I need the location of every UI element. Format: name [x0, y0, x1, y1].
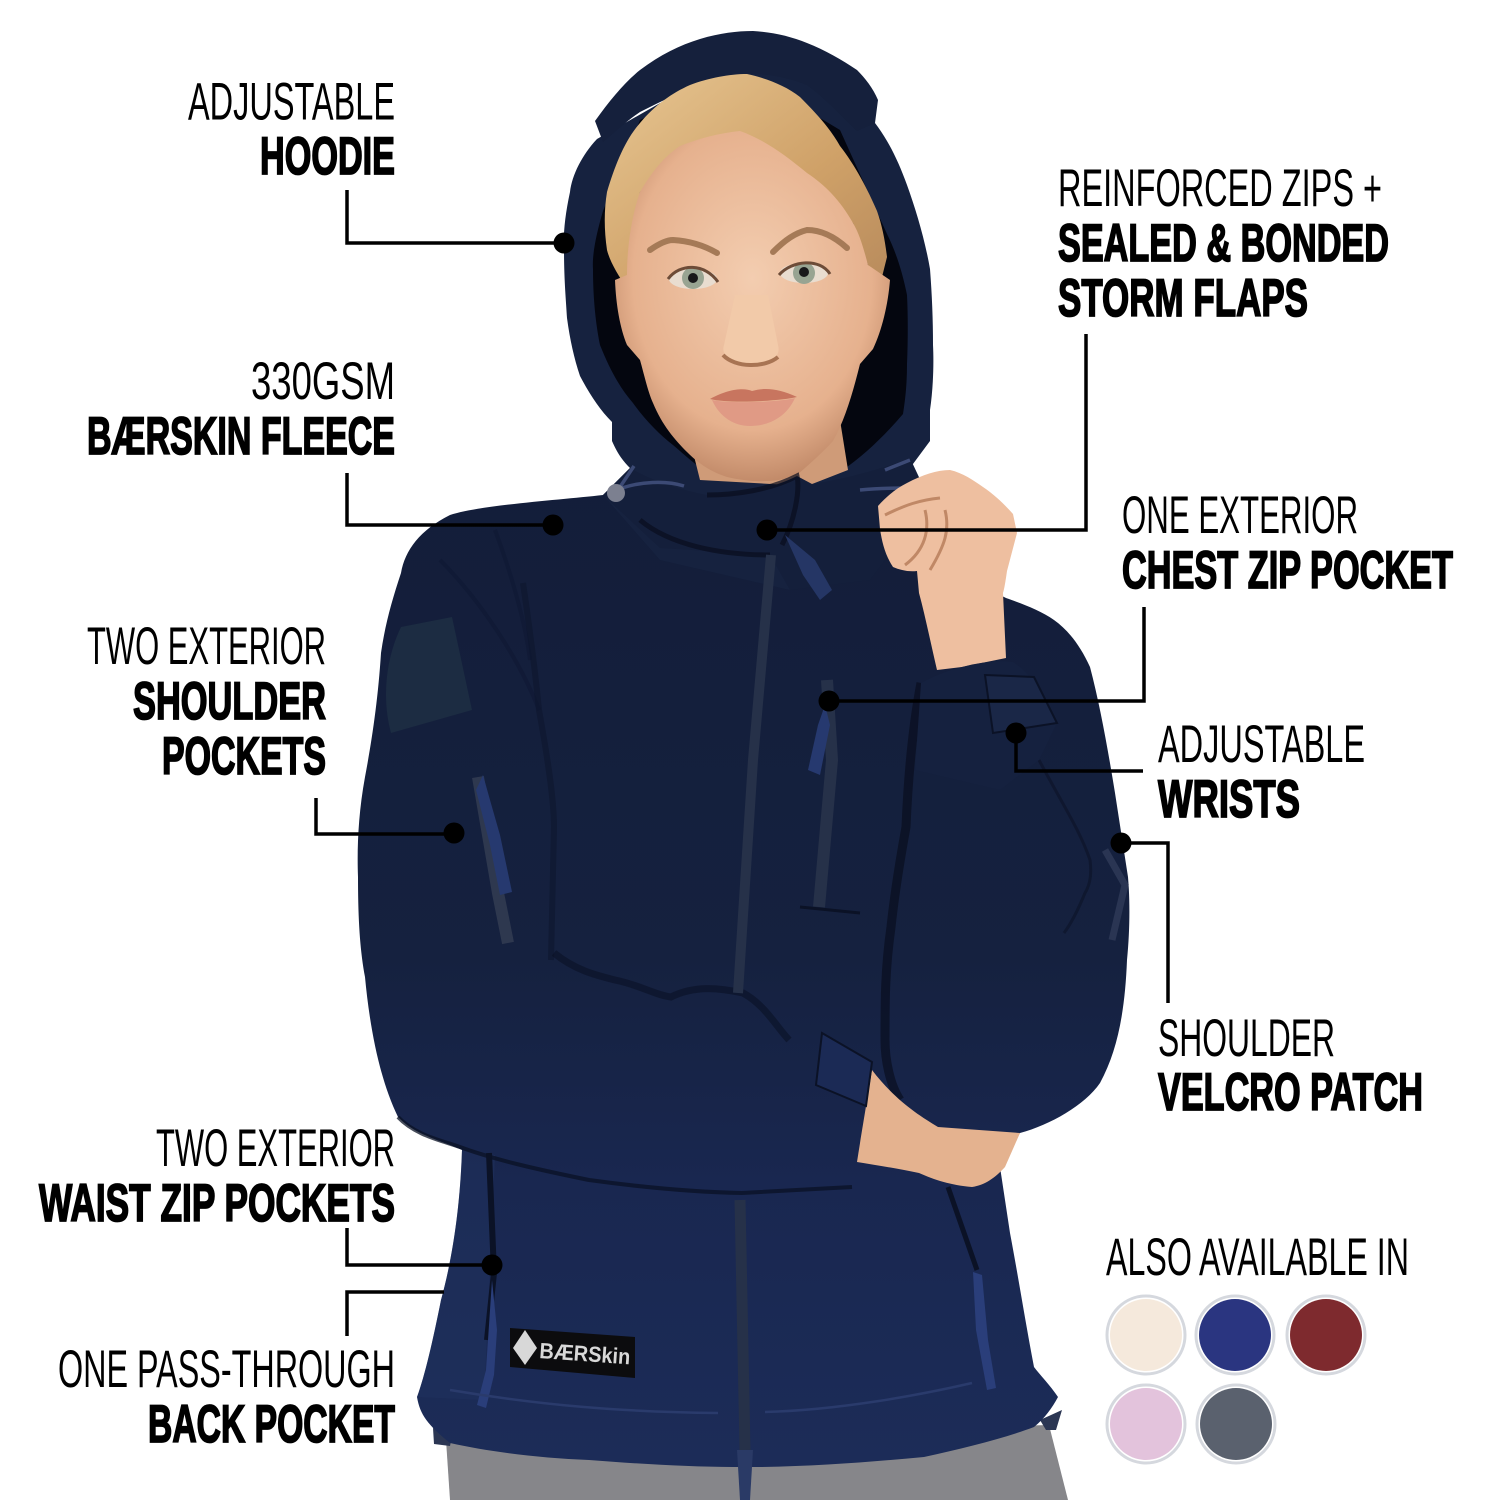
drawcords — [618, 460, 910, 490]
callout: shoulder pockets: TWO EXTERIOR — [87, 617, 326, 676]
shoulder velcro patch — [386, 617, 472, 733]
waist zip right — [948, 1187, 977, 1270]
zip puller at collar — [785, 535, 832, 600]
callout: adjustable wrists: WRISTS — [1158, 770, 1300, 829]
sleeve underside line — [398, 1117, 852, 1193]
swatch: royal blue — [1196, 1296, 1274, 1374]
raglan folds — [440, 530, 539, 710]
chest zip pocket — [819, 680, 832, 907]
callout: back pocket — [58, 1292, 444, 1454]
swatch: grey — [1197, 1385, 1275, 1463]
right waist puller — [973, 1272, 996, 1390]
shoulder seam shadow — [523, 583, 554, 960]
callout: waist zip pockets — [39, 1119, 502, 1276]
callout: chest zip pocket — [818, 486, 1453, 712]
wrist tab — [985, 675, 1057, 733]
callout: velcro patch — [1110, 832, 1423, 1122]
cord toggle — [607, 484, 625, 502]
grey trousers — [446, 1425, 1068, 1500]
callout: 330gsm fleece: 330GSM — [251, 352, 395, 411]
right sleeve pocket zip — [1105, 850, 1125, 940]
hood peak brim — [595, 31, 878, 142]
hem toggles — [433, 1410, 1062, 1446]
sleeve zip puller — [476, 775, 512, 895]
right arm inner fold — [885, 683, 921, 1100]
callout: storm flaps — [756, 159, 1389, 540]
swatch: maroon — [1287, 1296, 1365, 1374]
logo label — [510, 1328, 635, 1378]
callout: shoulder pockets: SHOULDER — [133, 672, 326, 731]
main zip — [738, 555, 771, 993]
face — [615, 131, 890, 481]
hood outer — [564, 50, 933, 590]
arm fold shadow — [554, 953, 789, 1040]
left body side panel — [417, 1150, 495, 1400]
raised hand and wrist — [878, 470, 1017, 670]
sleeve cuff tab, lower arm — [816, 1033, 872, 1106]
wrist cuff — [915, 661, 1057, 790]
waist zip left — [487, 1153, 494, 1340]
forearm sleeve seam — [1039, 760, 1091, 933]
neck — [690, 420, 848, 486]
callout: back pocket: ONE PASS-THROUGH — [58, 1340, 395, 1399]
hem stitching — [450, 1383, 972, 1413]
swatch: cream — [1107, 1296, 1185, 1374]
hood collar — [603, 458, 925, 590]
callout: 330gsm fleece — [87, 352, 564, 536]
lips — [710, 389, 797, 426]
swatch: pink — [1107, 1385, 1185, 1463]
lower zip — [740, 1200, 745, 1450]
callout: adjustable wrists — [1006, 715, 1365, 829]
eyebrows — [650, 230, 847, 253]
callout: velcro patch: SHOULDER — [1158, 1009, 1335, 1068]
callout: adjustable hoodie: HOODIE — [260, 127, 395, 186]
product photo: woman in navy fleece jacket — [358, 31, 1129, 1500]
collar shadow — [640, 476, 798, 555]
forearm — [857, 1070, 1020, 1187]
nose — [723, 295, 779, 366]
hair — [605, 74, 887, 290]
callout: adjustable hoodie — [188, 72, 574, 254]
callout: waist zip pockets: WAIST ZIP POCKETS — [39, 1174, 395, 1233]
eyes — [668, 262, 830, 289]
zip end — [737, 1450, 753, 1500]
callout: adjustable wrists: ADJUSTABLE — [1158, 715, 1365, 774]
jacket body and sleeves — [358, 470, 1129, 1467]
sleeve zip pocket — [478, 777, 508, 943]
hood interior — [593, 70, 908, 472]
callout: shoulder pockets — [87, 617, 464, 844]
callout: adjustable hoodie: ADJUSTABLE — [188, 72, 395, 132]
callout: back pocket: BACK POCKET — [148, 1395, 395, 1454]
callout: storm flaps: STORM FLAPS — [1058, 269, 1308, 328]
finger lines — [885, 498, 947, 570]
callout: waist zip pockets: TWO EXTERIOR — [156, 1119, 395, 1178]
colour options — [1106, 1228, 1409, 1463]
left waist puller — [477, 1280, 497, 1408]
chest pocket bottom — [800, 907, 860, 913]
callout: shoulder pockets: POCKETS — [162, 727, 326, 786]
chest zip puller — [808, 705, 830, 775]
callout: 330gsm fleece: BÆRSKIN FLEECE — [87, 407, 395, 466]
logo label: BÆRSkin — [539, 1338, 631, 1369]
